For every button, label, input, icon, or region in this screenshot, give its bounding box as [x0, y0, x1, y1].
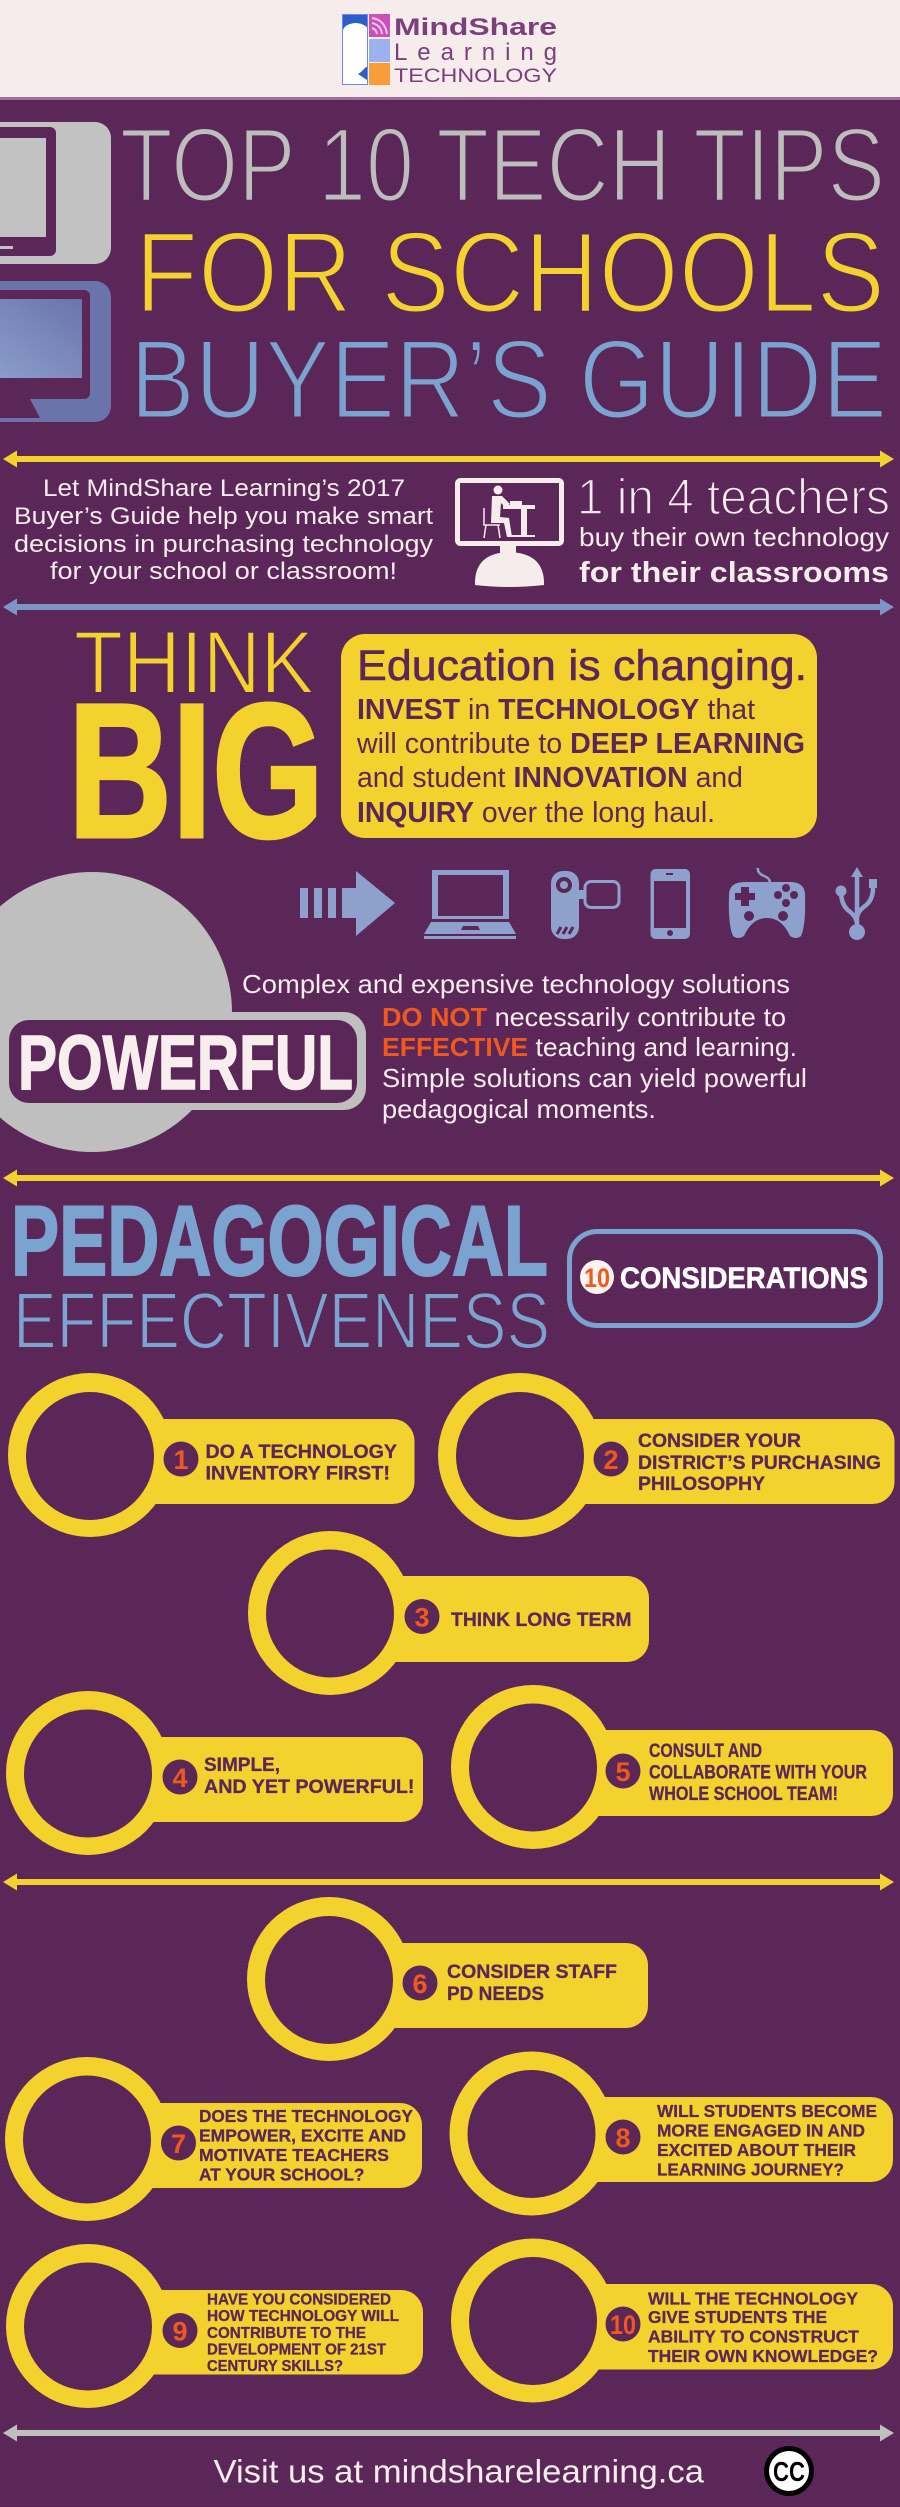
callout: education is changing: will contribute to DEEP LEARNING	[356, 728, 805, 760]
intro text block	[14, 475, 433, 585]
item 6: PD NEEDS	[447, 1983, 544, 2005]
item 8: WILL STUDENTS BECOME	[657, 2101, 877, 2121]
arrow: yellow divider	[3, 450, 894, 468]
arrow: grey divider	[3, 2424, 894, 2442]
icon: creative commons	[764, 2446, 814, 2496]
heading: pedagogical effectiveness: PEDAGOGICAL	[11, 1185, 548, 1296]
icon: creative commons: CC	[773, 2456, 805, 2487]
icon: laptop	[424, 870, 516, 939]
item 7: DOES THE TECHNOLOGY	[199, 2106, 413, 2126]
item 6	[247, 1897, 648, 2061]
icon: student at desk on monitor	[458, 480, 562, 587]
item 2: 2	[603, 1445, 619, 1475]
item 8: EXCITED ABOUT THEIR	[657, 2140, 856, 2160]
item 5: 5	[615, 1757, 631, 1787]
arrow: blue divider	[3, 598, 894, 616]
item 10: THEIR OWN KNOWLEDGE?	[648, 2346, 878, 2366]
item 1: INVENTORY FIRST!	[206, 1462, 390, 1484]
item 1: DO A TECHNOLOGY	[206, 1441, 397, 1463]
item 2: PHILOSOPHY	[638, 1473, 765, 1495]
item 7	[5, 2057, 422, 2221]
item 7: 7	[171, 2129, 186, 2159]
callout: education is changing: INVEST in TECHNOLOGY that	[357, 694, 755, 726]
item 7: MOTIVATE TEACHERS	[199, 2145, 389, 2165]
item 2: DISTRICT’S PURCHASING	[638, 1452, 881, 1474]
item 3: 3	[414, 1602, 430, 1632]
item 4: 4	[172, 1763, 188, 1793]
item 4: AND YET POWERFUL!	[204, 1776, 414, 1798]
item 10: 10	[610, 2310, 636, 2340]
text block: complex and expensive: DO NOT necessarily contribute to	[382, 1002, 786, 1032]
logo: MindShare Learning Technology	[342, 14, 557, 87]
text block: complex and expensive	[242, 969, 807, 1124]
badge: 10 considerations: 10	[584, 1263, 610, 1293]
logo: MindShare Learning Technology: Learning	[394, 39, 557, 66]
item 1: 1	[173, 1445, 189, 1475]
intro text block: Let MindShare Learning’s 2017	[43, 475, 405, 502]
item 10	[451, 2238, 893, 2402]
item 4	[6, 1691, 423, 1855]
intro text block: decisions in purchasing technology	[14, 531, 433, 558]
item 7: EMPOWER, EXCITE AND	[199, 2126, 406, 2146]
badge: 10 considerations: CONSIDERATIONS	[620, 1262, 868, 1295]
item 10: GIVE STUDENTS THE	[648, 2307, 827, 2327]
text block: complex and expensive: Complex and expensive technology solutions	[242, 969, 790, 999]
footer: website: Visit us at mindsharelearning.ca	[214, 2454, 704, 2490]
item 2: CONSIDER YOUR	[638, 1430, 801, 1452]
item 1	[8, 1373, 414, 1537]
heading: think big	[68, 612, 324, 878]
icon: grey monitor	[0, 122, 111, 264]
text block: complex and expensive: pedagogical moments.	[382, 1094, 656, 1124]
item 9: CONTRIBUTE TO THE	[207, 2325, 366, 2342]
item 7: AT YOUR SCHOOL?	[199, 2164, 364, 2184]
title	[120, 107, 887, 442]
icon: blue monitor	[0, 281, 111, 422]
statistic: 1 in 4 teachers	[577, 469, 890, 589]
header band with logo	[0, 0, 900, 100]
callout: education is changing: INQUIRY over the long haul.	[357, 797, 715, 829]
item 8: 8	[615, 2123, 631, 2153]
heading: think big: BIG	[68, 663, 324, 878]
text block: complex and expensive: EFFECTIVE teaching and learning.	[382, 1032, 797, 1062]
item 9: HAVE YOU CONSIDERED	[207, 2292, 391, 2308]
heading: pedagogical effectiveness	[11, 1185, 550, 1365]
item 6: CONSIDER STAFF	[447, 1961, 617, 1983]
icon: smartphone	[650, 869, 690, 939]
badge: 10 considerations	[570, 1232, 880, 1326]
intro text block: Buyer’s Guide help you make smart	[14, 503, 433, 530]
arrow: yellow divider	[3, 1874, 894, 1890]
icon: usb symbol	[836, 867, 877, 940]
icon: game controller	[729, 868, 805, 938]
panel: powerful badge on grey circle	[0, 872, 366, 1152]
item 9: CENTURY SKILLS?	[207, 2358, 343, 2375]
arrow: yellow divider	[3, 1170, 894, 1186]
item 5: COLLABORATE WITH YOUR	[649, 1762, 867, 1784]
icon: arrow	[300, 871, 395, 936]
item 9: DEVELOPMENT OF 21ST	[207, 2342, 387, 2358]
item 3: THINK LONG TERM	[451, 1609, 632, 1631]
statistic: 1 in 4 teachers: for their classrooms	[579, 557, 889, 589]
intro text block: for your school or classroom!	[50, 558, 397, 585]
item 9: HOW TECHNOLOGY WILL	[207, 2308, 399, 2325]
item 4: SIMPLE,	[204, 1754, 280, 1776]
panel: powerful badge on grey circle: POWERFUL	[18, 1020, 353, 1106]
heading: think big: THINK	[74, 612, 314, 712]
callout: education is changing	[341, 634, 817, 838]
logo: MindShare Learning Technology: TECHNOLOGY	[394, 66, 557, 87]
item 8: LEARNING JOURNEY?	[657, 2160, 844, 2180]
statistic: 1 in 4 teachers: 1 in 4 teachers	[577, 469, 890, 525]
heading: pedagogical effectiveness: EFFECTIVENESS	[13, 1276, 550, 1365]
item 3	[248, 1531, 649, 1695]
item 2	[438, 1373, 894, 1537]
item 10: WILL THE TECHNOLOGY	[648, 2288, 858, 2308]
callout: education is changing: and student INNOVATION and	[357, 762, 743, 794]
text block: complex and expensive: Simple solutions can yield powerful	[382, 1063, 807, 1093]
logo: MindShare Learning Technology: MindShare	[394, 14, 557, 41]
item 8	[450, 2052, 893, 2216]
item 6: 6	[412, 1969, 428, 1999]
item 8: MORE ENGAGED IN AND	[657, 2120, 865, 2140]
statistic: 1 in 4 teachers: buy their own technology	[579, 522, 889, 552]
item 5	[451, 1685, 893, 1849]
item 9: 9	[172, 2316, 188, 2346]
icon: video camera	[551, 871, 619, 939]
callout: education is changing: Education is changing.	[357, 642, 807, 690]
item 9	[6, 2244, 423, 2408]
item 10: ABILITY TO CONSTRUCT	[648, 2326, 859, 2346]
item 5: WHOLE SCHOOL TEAM!	[649, 1784, 838, 1805]
item 5: CONSULT AND	[649, 1741, 762, 1762]
